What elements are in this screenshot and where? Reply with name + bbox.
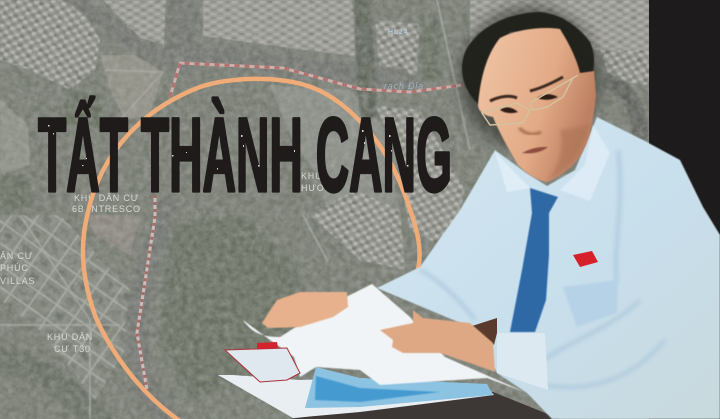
map: place labels: HƯƠNG (301, 183, 340, 193)
right hand (380, 310, 495, 372)
hair (462, 12, 594, 104)
shirt pocket (563, 280, 618, 327)
face (478, 28, 596, 182)
map: place labels: 6B INTRESCO (72, 204, 141, 214)
papers: red-edged notebook (225, 348, 300, 382)
map: place labels: CƯ T30 (54, 344, 91, 354)
title: distressed ink specks (48, 125, 408, 170)
left collar (495, 152, 530, 192)
map: place labels: KHU DÂN CƯ (74, 193, 139, 203)
red tag (257, 342, 278, 349)
papers: lower folder stack (218, 367, 494, 418)
face shading (545, 125, 590, 181)
tie (510, 188, 558, 332)
map: pink dashed boundary (137, 63, 463, 390)
map: place labels (0, 29, 424, 354)
map: place labels: rạch Đỉa (384, 81, 424, 91)
map: place labels: HL24 (388, 29, 408, 36)
map: place labels: ÂN CƯ (0, 251, 33, 261)
map: place labels: PHÚC (0, 263, 29, 273)
right black panel (649, 0, 720, 419)
facial features (490, 77, 563, 153)
papers: open document (243, 284, 527, 393)
shirt folds (420, 150, 665, 387)
orange circle outline (83, 79, 420, 419)
map: place labels: VILLAS (0, 276, 35, 286)
red lapel pin (573, 251, 598, 267)
right collar (560, 125, 610, 201)
map: place labels: KHU (301, 171, 322, 181)
map: place labels: KHU DÂN (47, 332, 93, 342)
glasses (482, 75, 578, 125)
shirt (377, 117, 720, 419)
head shadow glow (460, 6, 600, 150)
chair gap (472, 318, 497, 345)
map: roads (0, 0, 470, 419)
map: green parcels (0, 20, 440, 400)
left hand (262, 292, 348, 328)
shirt cuff (497, 333, 548, 390)
portrait of man at desk (218, 6, 720, 419)
desk (290, 392, 560, 419)
